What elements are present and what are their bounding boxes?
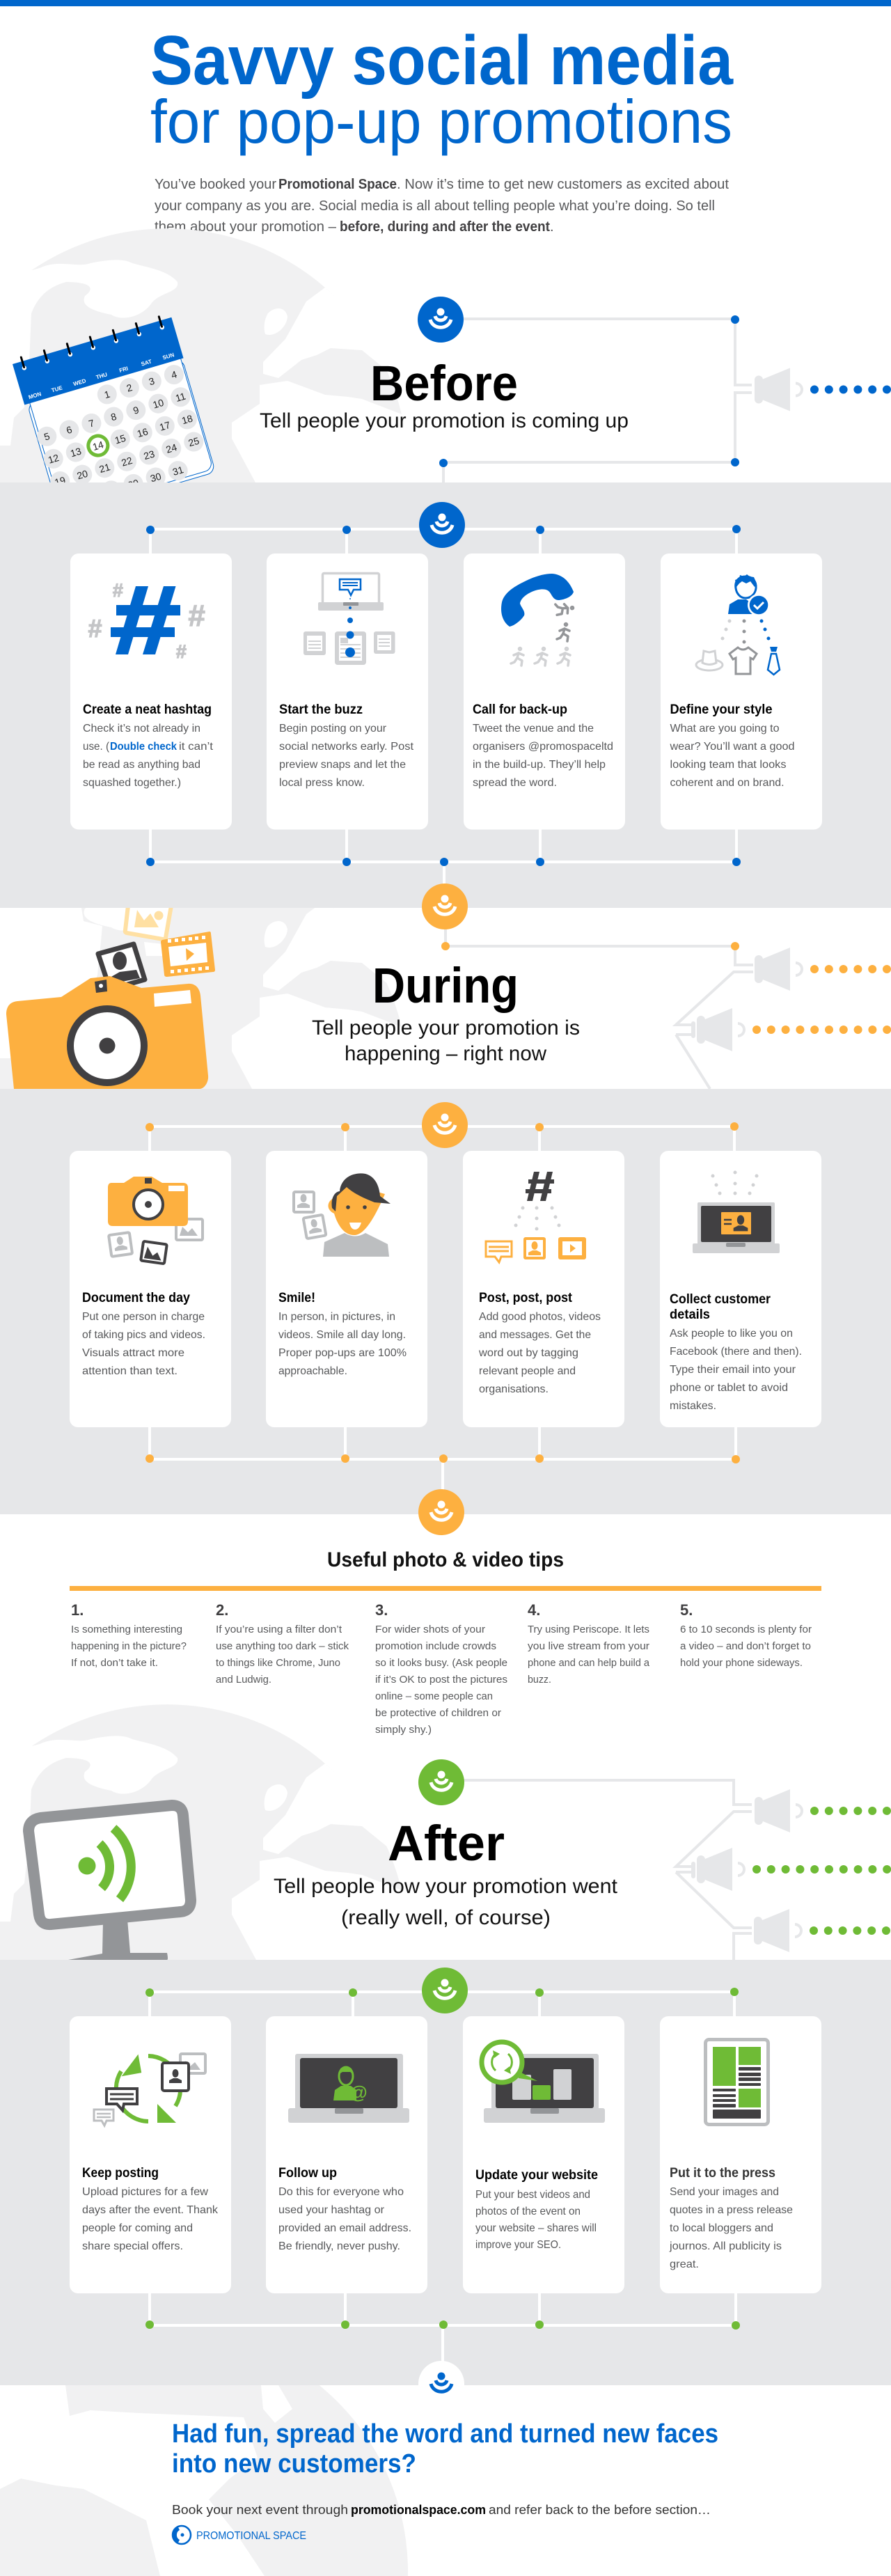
call to action: and refer back to the before section… — [489, 2503, 711, 2517]
icon: laptop with contact: @ — [349, 2082, 368, 2103]
heading: Follow up — [278, 2166, 337, 2181]
subheading: Tell people how your promotion went — [274, 1875, 618, 1898]
intro text: them about your promotion – — [155, 219, 337, 235]
tip 1: Is something interesting — [71, 1624, 182, 1635]
camera illustration — [6, 906, 215, 1089]
sound dots — [814, 386, 890, 394]
body text: Put one person in charge — [82, 1311, 205, 1323]
globe background — [0, 1704, 411, 1960]
intro text: . Now it’s time to get new customers as excited about — [397, 177, 729, 192]
heading: Document the day — [82, 1291, 190, 1305]
calendar illustration: 26 — [60, 496, 74, 510]
body text — [279, 723, 414, 789]
tip 1: 1. — [71, 1601, 84, 1619]
calendar illustration: 9 — [132, 404, 140, 416]
calendar illustration: 19 — [53, 474, 67, 488]
body text: Type their email into your — [670, 1364, 796, 1376]
body text: local press know. — [279, 777, 365, 789]
calendar illustration: WED — [72, 377, 87, 387]
globe background — [0, 908, 401, 1089]
body text: Ask people to like you on — [670, 1328, 793, 1340]
body text: it can’t — [179, 741, 214, 753]
body text: Do this for everyone who — [278, 2186, 404, 2198]
body text — [83, 723, 214, 789]
intro text: . — [550, 219, 554, 235]
calendar illustration: 13 — [69, 446, 83, 459]
body text: in the build-up. They’ll help — [473, 759, 606, 771]
card: follow up — [266, 2016, 427, 2293]
body text: used your hashtag or — [278, 2204, 385, 2216]
body text: videos. Smile all day long. — [278, 1329, 406, 1341]
card: collect customer details — [660, 1151, 821, 1427]
call to action: Book your next event through — [172, 2503, 348, 2517]
body text: squashed together.) — [83, 777, 181, 789]
heading: Smile! — [278, 1291, 315, 1305]
tip 3: if it’s OK to post the pictures — [375, 1674, 507, 1686]
subheading: (really well, of course) — [341, 1906, 551, 1929]
body text: mistakes. — [670, 1400, 716, 1412]
card: define your style — [661, 553, 822, 830]
calendar illustration: 24 — [165, 441, 178, 455]
body text: Tweet the venue and the — [473, 723, 594, 735]
tip 3: be protective of children or — [375, 1707, 501, 1719]
calendar illustration: 6 — [65, 424, 74, 436]
body text: photos of the event on — [475, 2206, 581, 2217]
body text: journos. All publicity is — [669, 2240, 782, 2252]
body text: Facebook (there and then). — [670, 1346, 802, 1358]
body text: approachable. — [278, 1365, 347, 1377]
calendar illustration: 3 — [148, 375, 156, 387]
divider bar — [70, 1586, 821, 1591]
calendar illustration: 11 — [174, 390, 187, 404]
heading: Keep posting — [82, 2166, 159, 2181]
body text: to local bloggers and — [670, 2222, 773, 2234]
body text — [473, 723, 613, 789]
tip 3: so it looks busy. (Ask people — [375, 1657, 507, 1669]
calendar illustration: 21 — [98, 461, 111, 475]
body text: your website – shares will — [475, 2222, 597, 2234]
tip 2: to things like Chrome, Juno — [216, 1657, 340, 1669]
intro text: Promotional Space — [278, 177, 397, 192]
connector dots — [439, 315, 739, 467]
connectors — [150, 1126, 736, 1490]
subheading — [274, 1875, 618, 1929]
body text — [82, 1311, 205, 1377]
band background — [0, 482, 891, 908]
card: update your website — [463, 2016, 624, 2293]
icon: newspaper tablet — [706, 2040, 768, 2125]
connector dots — [146, 525, 741, 866]
tip 2: use anything too dark – stick — [216, 1640, 349, 1652]
icon: laptop with contact — [288, 2054, 409, 2123]
body text: looking team that looks — [670, 759, 787, 771]
heading — [670, 1292, 771, 1322]
panel: before steps — [0, 482, 891, 908]
body text: coherent and on brand. — [670, 777, 784, 789]
subheading: Tell people your promotion is coming up — [260, 409, 629, 432]
heading: details — [670, 1307, 710, 1322]
body text: Add good photos, videos — [479, 1311, 601, 1323]
subheading — [312, 1016, 580, 1065]
calendar illustration: 30 — [149, 471, 163, 484]
calendar illustration: 20 — [76, 468, 89, 482]
closing question: into new customers? — [172, 2449, 416, 2479]
connector lines — [443, 319, 752, 482]
icon: phone and runners — [501, 574, 574, 666]
tip 3: For wider shots of your — [375, 1624, 485, 1635]
calendar illustration: SAT — [141, 359, 152, 368]
card: call for back-up — [464, 553, 625, 830]
globe background — [0, 228, 411, 484]
calendar illustration: 4 — [170, 368, 178, 381]
body text: Double check — [110, 741, 177, 753]
closing question — [172, 2419, 718, 2479]
connectors — [150, 529, 736, 891]
body text — [82, 2186, 219, 2252]
intro text: before, during and after the event — [340, 219, 550, 235]
heading: Put it to the press — [670, 2166, 775, 2181]
calendar illustration: MON — [28, 391, 42, 400]
tip 3: online – some people can — [375, 1690, 493, 1702]
body text: relevant people and — [479, 1365, 576, 1377]
icon: hashtag: # — [112, 580, 123, 601]
body text: Visuals attract more — [82, 1347, 184, 1359]
intro text — [155, 177, 729, 235]
icon: laptop with chart — [482, 2042, 605, 2123]
panel: after header — [0, 1704, 890, 1960]
heading: Start the buzz — [279, 702, 363, 717]
globe background — [0, 2385, 408, 2576]
icon: hashtag: # — [188, 599, 205, 633]
calendar illustration: 1 — [103, 388, 111, 400]
title: for pop-up promotions — [150, 87, 732, 156]
calendar illustration: 25 — [187, 435, 200, 448]
connector dots — [441, 942, 739, 950]
title — [150, 22, 734, 156]
calendar illustration: 10 — [152, 397, 165, 411]
speakers — [691, 1789, 803, 1952]
badge — [418, 1759, 464, 1805]
badge: tips — [418, 1489, 464, 1535]
badge — [422, 1968, 468, 2013]
badge — [419, 502, 465, 548]
body text: In person, in pictures, in — [278, 1311, 395, 1323]
card: post, post, post — [463, 1151, 624, 1427]
body text: organisers @promospaceltd — [473, 741, 613, 753]
heading: after: After — [388, 1816, 505, 1871]
body text: Check it’s not already in — [83, 723, 200, 735]
connector lines — [459, 1780, 752, 1960]
icon: laptop and documents — [303, 574, 395, 665]
body text — [669, 2186, 793, 2270]
title: Savvy social media — [150, 22, 734, 100]
panel: footer — [0, 2361, 718, 2576]
calendar illustration: 7 — [87, 417, 96, 430]
card: put it to the press — [660, 2016, 821, 2293]
icon: hashtag — [88, 580, 205, 662]
heading: Post, post, post — [479, 1291, 573, 1305]
calendar illustration: 14 — [91, 439, 105, 453]
heading: Create a neat hashtag — [83, 702, 212, 717]
body text: provided an email address. — [278, 2222, 411, 2234]
tip 3 — [375, 1601, 507, 1736]
subheading: happening – right now — [345, 1042, 546, 1065]
body text: phone or tablet to avoid — [670, 1382, 788, 1394]
speaker — [755, 368, 803, 411]
tip 5: 5. — [680, 1601, 693, 1619]
body text: attention than text. — [82, 1365, 178, 1377]
calendar illustration: FRI — [118, 366, 129, 374]
body text: improve your SEO. — [475, 2239, 561, 2251]
band background — [0, 1089, 891, 1514]
body text: quotes in a press release — [670, 2204, 793, 2216]
tip 4: Try using Periscope. It lets — [528, 1624, 649, 1635]
body text: wear? You’ll want a good — [669, 741, 795, 753]
body text: organisations. — [479, 1383, 549, 1395]
tip 2: and Ludwig. — [216, 1674, 271, 1686]
tip 3: simply shy.) — [375, 1724, 432, 1736]
body text: spread the word. — [473, 777, 557, 789]
tip 4: 4. — [528, 1601, 540, 1619]
tip 4: phone and can help build a — [528, 1657, 650, 1669]
icon: camera and photos — [108, 1177, 203, 1264]
badge — [418, 297, 464, 343]
calendar illustration: 31 — [171, 464, 185, 478]
body text: and messages. Get the — [479, 1329, 591, 1341]
tip 3: promotion include crowds — [375, 1640, 496, 1652]
card: create a neat hashtag — [70, 553, 232, 830]
band background — [0, 1960, 891, 2385]
heading: before: Before — [370, 356, 518, 411]
tip 2: 2. — [216, 1601, 228, 1619]
connectors — [150, 1992, 736, 2367]
heading: Call for back-up — [473, 702, 567, 717]
calendar illustration: 27 — [82, 490, 96, 504]
icon: laptop with contact — [693, 1171, 780, 1253]
body text: of taking pics and videos. — [82, 1329, 205, 1341]
icon: hashtag and media tiles — [486, 1172, 586, 1262]
call to action — [172, 2503, 711, 2517]
body text — [278, 2186, 411, 2252]
heading: Useful photo & video tips — [327, 1548, 564, 1571]
body text: Begin posting on your — [279, 723, 387, 735]
body text: days after the event. Thank — [82, 2204, 219, 2216]
tip 3: 3. — [375, 1601, 388, 1619]
tip 5: 6 to 10 seconds is plenty for — [680, 1624, 812, 1635]
top bar — [0, 0, 891, 6]
body text: social networks early. Post — [279, 741, 414, 753]
badge — [418, 2361, 464, 2407]
tip 1: If not, don’t take it. — [71, 1657, 158, 1669]
body text: word out by tagging — [478, 1347, 578, 1359]
calendar illustration: 28 — [104, 483, 118, 497]
calendar illustration: 18 — [180, 412, 194, 426]
tip 5: hold your phone sideways. — [680, 1657, 803, 1669]
body text: great. — [670, 2259, 699, 2270]
calendar illustration: 5 — [42, 430, 52, 443]
connector dots — [145, 1988, 740, 2330]
tip 5: a video – and don’t forget to — [680, 1640, 811, 1652]
body text — [478, 1311, 601, 1395]
icon: refresh cycle — [94, 2054, 205, 2126]
calendar illustration: 22 — [120, 455, 134, 469]
logo: PROMOTIONAL SPACE — [196, 2530, 306, 2542]
card: keep posting — [70, 2016, 231, 2293]
tip 4: buzz. — [528, 1674, 551, 1686]
speakers — [691, 948, 803, 1051]
icon: hashtag: # — [88, 614, 102, 643]
icon: person and outfit — [696, 574, 780, 675]
heading: Define your style — [670, 702, 773, 717]
connector lines — [446, 929, 753, 1089]
intro text: your company as you are. Social media is all about telling people what you’re doing. So tell — [155, 198, 715, 214]
sound dots — [757, 969, 890, 1030]
calendar illustration: 15 — [113, 432, 127, 446]
panel: after steps — [0, 1960, 891, 2385]
body text: Upload pictures for a few — [82, 2186, 208, 2198]
tip 1: happening in the picture? — [71, 1640, 187, 1652]
calendar illustration — [13, 315, 214, 482]
body text — [669, 723, 795, 789]
panel: during steps — [0, 1089, 891, 1514]
body text: Send your images and — [670, 2186, 779, 2198]
card: start the buzz — [267, 553, 428, 830]
connector dots — [145, 1122, 740, 1463]
body text: Put your best videos and — [475, 2189, 590, 2201]
badge — [422, 1102, 468, 1148]
body text: Proper pop-ups are 100% — [278, 1347, 407, 1359]
closing question: Had fun, spread the word and turned new faces — [172, 2419, 718, 2449]
body text: share special offers. — [82, 2240, 183, 2252]
calendar illustration: 2 — [125, 382, 134, 394]
body text — [670, 1328, 802, 1412]
calendar illustration: 12 — [47, 452, 61, 466]
intro text: You’ve booked your — [155, 177, 276, 192]
calendar illustration: TUE — [51, 384, 63, 394]
body text: What are you going to — [670, 723, 780, 735]
monitor illustration — [29, 1805, 191, 1960]
panel: photo and video tips — [70, 1548, 821, 1736]
card: document the day — [70, 1151, 231, 1427]
body text — [278, 1311, 407, 1377]
calendar illustration: 16 — [136, 425, 150, 439]
calendar illustration: 17 — [158, 419, 172, 433]
tip 2: If you’re using a filter don’t — [216, 1624, 342, 1635]
calendar illustration: THU — [95, 371, 108, 381]
heading: Collect customer — [670, 1292, 771, 1307]
icon: smiling person — [294, 1173, 391, 1257]
calendar illustration: 8 — [109, 411, 118, 423]
heading: Update your website — [475, 2168, 598, 2183]
panel: during header — [0, 908, 891, 1089]
body text: preview snaps and let the — [279, 759, 406, 771]
body text: Be friendly, never pushy. — [278, 2240, 400, 2252]
body text: people for coming and — [82, 2222, 193, 2234]
call to action: promotionalspace.com — [351, 2503, 486, 2517]
sound dots — [757, 1811, 890, 1931]
tip 2 — [216, 1601, 349, 1686]
card: smile — [266, 1151, 427, 1427]
panel: before header — [0, 228, 890, 519]
tip 4 — [528, 1601, 650, 1686]
tip 4: you live stream from your — [528, 1640, 649, 1652]
logo — [173, 2526, 306, 2544]
badge: during transition — [422, 883, 468, 929]
body text — [475, 2189, 597, 2251]
subheading: Tell people your promotion is — [312, 1016, 580, 1039]
body text: be read as anything bad — [83, 759, 200, 771]
tip 1 — [71, 1601, 187, 1669]
calendar illustration: 23 — [142, 448, 156, 462]
body text: use. ( — [83, 741, 110, 753]
calendar illustration: 29 — [127, 477, 141, 491]
heading: during: During — [372, 959, 519, 1014]
calendar illustration: SUN — [162, 352, 175, 361]
icon: hashtag: # — [175, 641, 187, 662]
tip 5 — [680, 1601, 812, 1669]
